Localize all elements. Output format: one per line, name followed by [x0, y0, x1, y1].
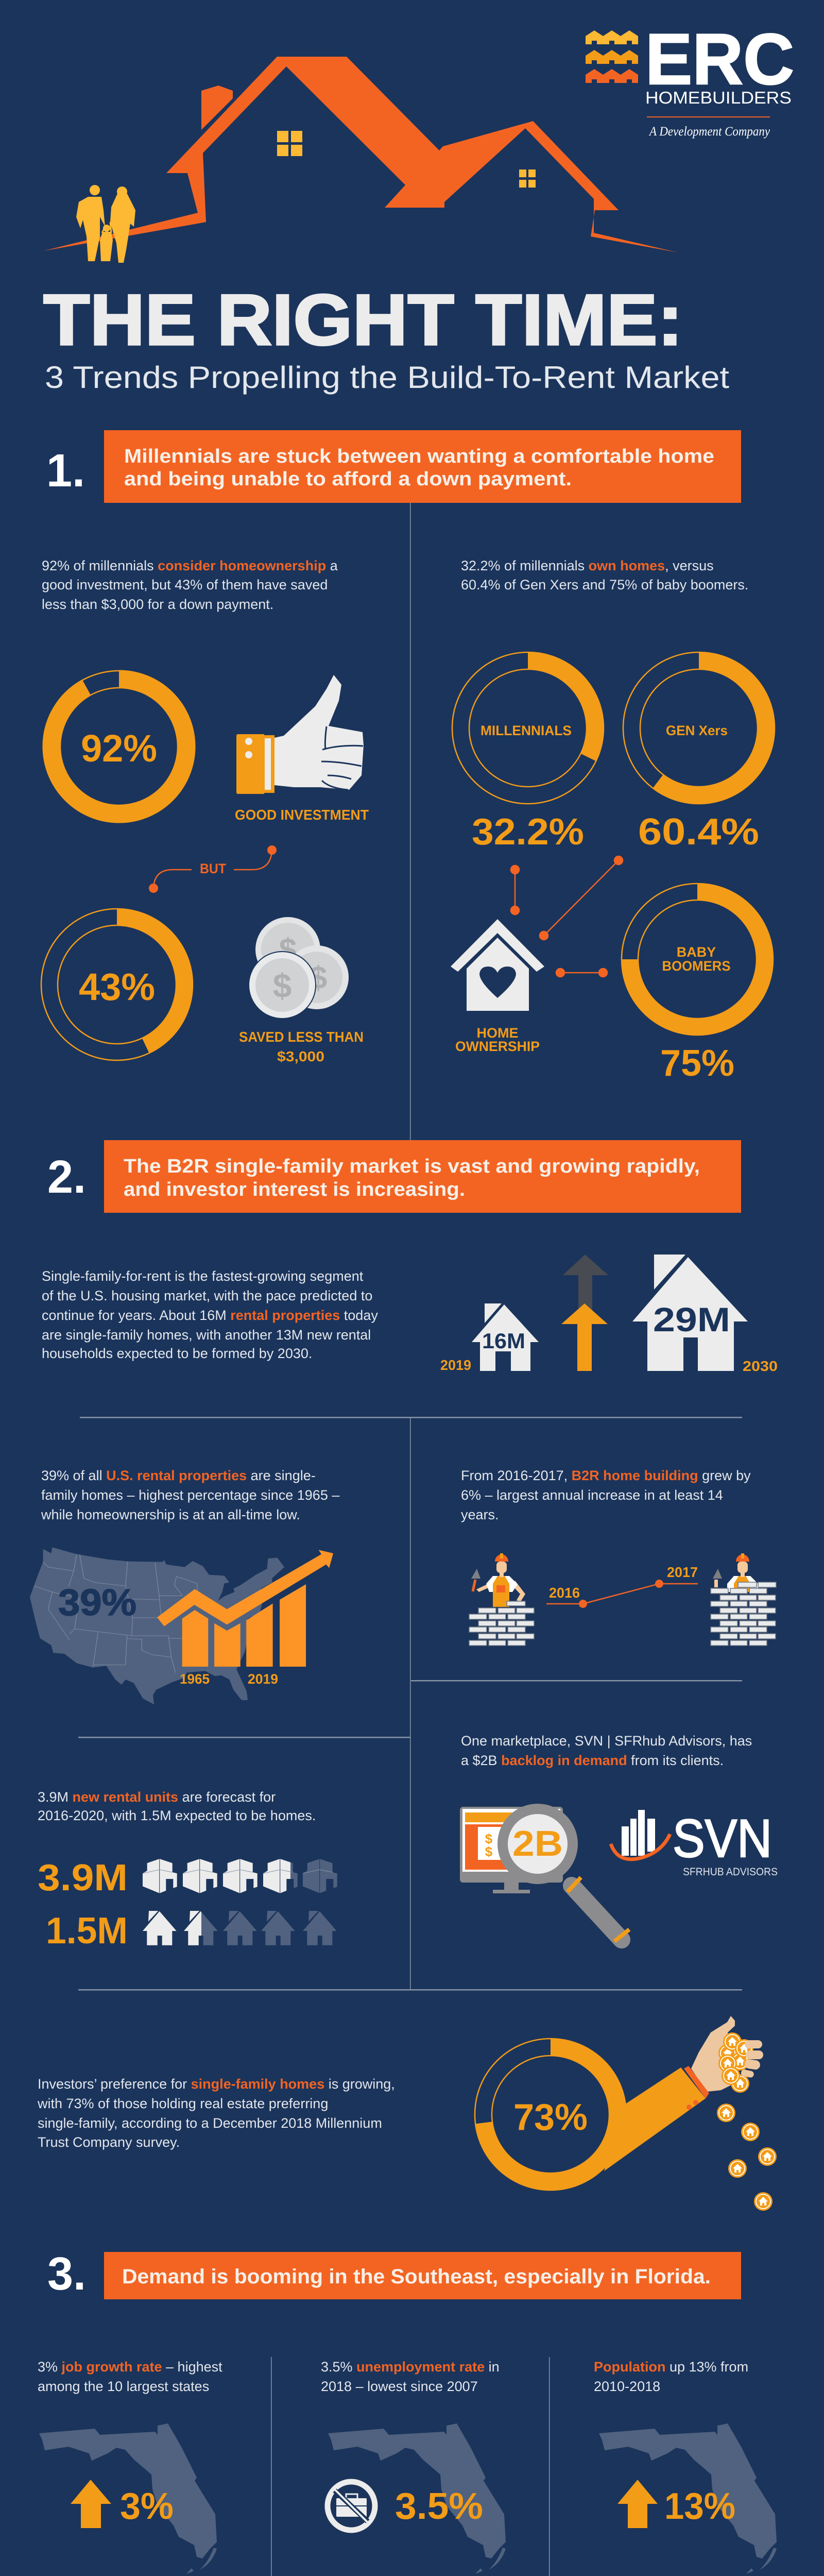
- value 75%: 75%: [660, 1043, 734, 1084]
- donut value: 73%: [513, 2097, 588, 2138]
- logo: SVN SFRhub Advisors: SVN: [673, 1809, 772, 1869]
- text block: continue for years. About 16M rental properties today: [42, 1308, 378, 1323]
- icon: monitor: [460, 1807, 563, 1893]
- value 1.5M: 1.5M: [46, 1910, 128, 1952]
- text block: 32.2% of millennials own homes, versus: [461, 558, 714, 573]
- label: HOME: [477, 1025, 518, 1041]
- logo tagline: A Development Company: [648, 125, 770, 139]
- icon: magnifying glass: [503, 1809, 629, 1941]
- text block: Single-family-for-rent is the fastest-growing segment: [42, 1268, 364, 1284]
- map: united states: [30, 1547, 284, 1704]
- section 3 heading: [47, 2248, 741, 2300]
- text block: up 13% from: [665, 2359, 748, 2375]
- donut 73%: [475, 2039, 626, 2190]
- text block: Investors’ preference for single-family homes is growing,: [38, 2076, 395, 2092]
- value 32.2%: 32.2%: [472, 811, 584, 853]
- banner text: Demand is booming in the Southeast, especially in Florida.: [122, 2265, 711, 2288]
- connector: 2016 to 2017: [546, 1564, 698, 1608]
- text block: households expected to be formed by 2030.: [42, 1346, 312, 1361]
- label: $3,000: [277, 1048, 324, 1064]
- text block: single-family, according to a December 2018 Millennium: [38, 2115, 382, 2131]
- arrow: grey up: [563, 1255, 608, 1311]
- value: 3%: [120, 2486, 174, 2527]
- panel: new rental units: [38, 1789, 337, 1952]
- text block: a $2B backlog in demand from its clients.: [461, 1753, 724, 1768]
- text block: Trust Company survey.: [38, 2134, 180, 2150]
- text block: years.: [461, 1507, 499, 1522]
- icon: right worker and wall: [711, 1553, 776, 1646]
- panel: millennials consider homeownership: [41, 558, 369, 1064]
- connector: 2016 to 2017: 2017: [667, 1564, 698, 1580]
- icon: no briefcase: [328, 2482, 375, 2530]
- icon: large window: [277, 131, 302, 156]
- logo wordmark: ERC: [645, 19, 794, 99]
- panel: population: [594, 2359, 777, 2574]
- value: 13%: [664, 2486, 735, 2527]
- logo subline: HOMEBUILDERS: [645, 88, 792, 107]
- text block: Population: [594, 2359, 665, 2375]
- text block: good investment, but 43% of them have saved: [42, 577, 328, 592]
- donut value: 43%: [79, 965, 155, 1008]
- panel: single-family-for-rent growth: [42, 1255, 778, 1374]
- icon: small window: [519, 170, 536, 188]
- subtitle: 3 Trends Propelling the Build-To-Rent Market: [45, 360, 729, 395]
- banner: [104, 2252, 741, 2299]
- connectors: [511, 856, 623, 977]
- title: THE RIGHT TIME:: [43, 279, 683, 360]
- text block: family homes – highest percentage since 1965 –: [41, 1487, 339, 1503]
- logo: SVN SFRhub Advisors: SFRHUB ADVISORS: [683, 1866, 778, 1878]
- header house illustration: [43, 57, 678, 263]
- icon: small house 16M: 16M: [482, 1329, 525, 1353]
- label: GOOD INVESTMENT: [235, 807, 369, 823]
- banner: [104, 430, 741, 503]
- icon: logo houses: [586, 30, 638, 83]
- icon: arm dropping coins: [604, 2016, 777, 2211]
- panel: job growth: [38, 2359, 222, 2574]
- label 2030: 2030: [743, 1358, 778, 1374]
- text block: One marketplace, SVN | SFRhub Advisors, has: [461, 1733, 752, 1749]
- text block: among the 10 largest states: [38, 2379, 209, 2394]
- value 3.9M: 3.9M: [38, 1857, 128, 1899]
- text block: with 73% of those holding real estate preferring: [37, 2096, 328, 2111]
- text block: 60.4% of Gen Xers and 75% of baby boomers.: [461, 577, 748, 592]
- icon: monitor: $: [485, 1844, 493, 1859]
- text block: 2010-2018: [594, 2379, 660, 2394]
- icon: large house 29M: 29M: [653, 1300, 730, 1338]
- text block: less than $3,000 for a down payment.: [42, 597, 273, 612]
- label: SAVED LESS THAN: [239, 1029, 364, 1045]
- number 1: 1.: [46, 445, 85, 497]
- panel: unemployment: [321, 2359, 506, 2574]
- icon: house with heart: [451, 919, 544, 1011]
- panel: investor preference: [37, 2016, 777, 2211]
- icon: large house 29M: [632, 1255, 748, 1371]
- logo: SVN SFRhub Advisors: [611, 1809, 778, 1878]
- panel: home ownership by generation: [451, 558, 775, 1084]
- chart: rising bars: [157, 1550, 333, 1667]
- value 60.4%: 60.4%: [638, 811, 759, 853]
- donut label: MILLENNIALS: [480, 723, 572, 738]
- text block: 3.9M new rental units are forecast for: [38, 1789, 276, 1805]
- panel: 39% of rental properties: [30, 1468, 339, 1704]
- banner: [104, 1140, 741, 1213]
- banner text: Millennials are stuck between wanting a comfortable home: [124, 446, 714, 467]
- pictogram: homes: [143, 1911, 337, 1945]
- section 1 heading: [46, 430, 741, 503]
- number 3: 3.: [47, 2248, 86, 2300]
- panel: SVN backlog: [460, 1733, 778, 1941]
- section 2 heading: [47, 1140, 741, 1213]
- text block: 2016-2020, with 1.5M expected to be homes.: [38, 1808, 316, 1823]
- icon: family silhouette: [76, 185, 135, 263]
- connector: 2016 to 2017: 2016: [549, 1585, 580, 1601]
- icon: small house 16M: [472, 1303, 539, 1371]
- text block: 3% job growth rate – highest: [38, 2359, 222, 2375]
- chart labels: 1965: [180, 1671, 210, 1687]
- text block: 39% of all U.S. rental properties are single-: [41, 1468, 316, 1483]
- text block: 2018 – lowest since 2007: [321, 2379, 478, 2394]
- icon: monitor: $: [485, 1831, 493, 1846]
- connector: but: BUT: [200, 861, 226, 876]
- label: OWNERSHIP: [455, 1039, 540, 1054]
- icon: left worker and wall: [469, 1553, 534, 1646]
- donut baby boomers: [622, 884, 773, 1035]
- text block: 3.5% unemployment rate in: [321, 2359, 500, 2375]
- text block: 92% of millennials consider homeownership a: [42, 558, 338, 573]
- donut label: BOOMERS: [662, 958, 730, 974]
- text block: 6% – largest annual increase in at least 14: [461, 1487, 723, 1503]
- donut gen x: [623, 652, 775, 804]
- arrow: up: [617, 2480, 658, 2528]
- label 2019: 2019: [440, 1357, 471, 1373]
- icon: coins: $: [273, 967, 291, 1005]
- donut label: BABY: [677, 944, 716, 960]
- value: 3.5%: [395, 2486, 483, 2527]
- map: florida: [599, 2424, 777, 2574]
- icon: coins: $: [310, 960, 327, 996]
- donut 43%: [41, 909, 193, 1060]
- donut label: GEN Xers: [666, 723, 728, 738]
- map: florida: [39, 2424, 217, 2574]
- donut millennials: [452, 652, 604, 804]
- panel: B2R home building growth: [461, 1468, 776, 1646]
- text block: of the U.S. housing market, with the pace predicted to: [42, 1288, 372, 1303]
- chart labels: 2019: [248, 1671, 278, 1687]
- text block: are single-family homes, with another 13M new rental: [42, 1327, 371, 1343]
- icon: house roofline: [43, 57, 678, 252]
- donut value: 92%: [81, 727, 157, 770]
- map: united states: 39%: [58, 1582, 136, 1623]
- banner text: The B2R single-family market is vast and growing rapidly,: [124, 1156, 700, 1177]
- icon: thumbs up: [236, 675, 364, 794]
- banner text: and being unable to afford a down payment.: [124, 468, 572, 490]
- logo: ERC Homebuilders: [586, 19, 794, 139]
- connector: but: [149, 845, 277, 893]
- text block: while homeownership is at an all-time low.: [41, 1507, 300, 1522]
- map: florida: [328, 2424, 506, 2574]
- number 2: 2.: [47, 1151, 86, 1203]
- icon: chimney: [201, 86, 233, 130]
- icon: magnifying glass: 2B: [512, 1823, 563, 1863]
- donut 92%: [43, 671, 195, 822]
- text block: From 2016-2017, B2R home building grew by: [461, 1468, 751, 1483]
- pictogram: rental units: [143, 1859, 337, 1893]
- banner text: and investor interest is increasing.: [124, 1179, 465, 1200]
- arrow: orange up: [561, 1303, 608, 1371]
- icon: coins: $: [279, 933, 297, 968]
- icon: coins: [249, 917, 349, 1019]
- arrow: up: [71, 2480, 111, 2528]
